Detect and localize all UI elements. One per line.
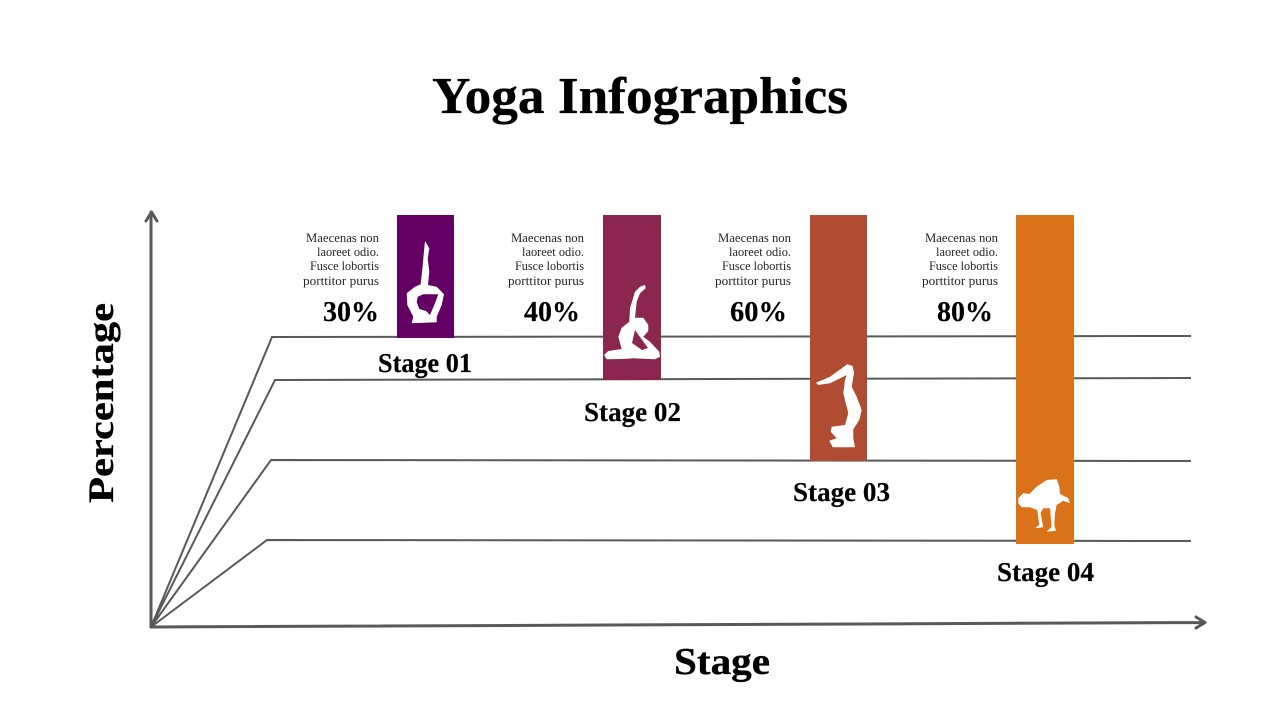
description text: Fusce lobortis — [515, 258, 584, 273]
bar: stage 03 — [810, 215, 867, 461]
description text: porttitor purus — [303, 273, 379, 288]
title: Yoga Infographics — [432, 68, 848, 125]
description text — [715, 230, 791, 288]
description text: porttitor purus — [715, 273, 791, 288]
x axis label: Stage — [674, 641, 770, 683]
description text: Maecenas non — [925, 230, 998, 245]
description text — [303, 230, 379, 288]
bar: stage 01 — [397, 215, 454, 338]
bar: stage 04 — [1016, 215, 1074, 544]
icon: yoga pose 4 — [1018, 479, 1070, 532]
stage 03 group — [715, 215, 890, 507]
percentage: 30% — [323, 296, 379, 328]
icon: yoga pose 1 — [407, 241, 444, 323]
description text: Maecenas non — [511, 230, 584, 245]
icon: yoga pose 3 — [816, 364, 862, 447]
icon: yoga pose 2 — [604, 285, 660, 359]
stage 01 group — [303, 215, 472, 378]
horizontal axis arrow — [151, 617, 1205, 628]
description text: laoreet odio. — [729, 244, 791, 259]
stage 02 group — [508, 215, 681, 427]
stage label: Stage 03 — [793, 477, 890, 507]
vertical axis arrow — [146, 212, 157, 627]
percentage: 60% — [730, 296, 787, 328]
description text: laoreet odio. — [936, 244, 998, 259]
description text: Maecenas non — [306, 230, 379, 245]
percentage: 40% — [524, 296, 580, 328]
description text: laoreet odio. — [317, 244, 379, 259]
description text: laoreet odio. — [522, 244, 584, 259]
description text — [508, 230, 584, 288]
description text: Fusce lobortis — [310, 258, 379, 273]
stage lines — [151, 336, 1191, 627]
stage label: Stage 04 — [997, 557, 1094, 587]
stage label: Stage 01 — [378, 348, 472, 378]
percentage: 80% — [937, 296, 993, 328]
stage label: Stage 02 — [584, 397, 681, 427]
description text: Maecenas non — [718, 230, 791, 245]
y axis label: Percentage — [81, 303, 121, 503]
bar: stage 02 — [603, 215, 661, 380]
description text: porttitor purus — [922, 273, 998, 288]
description text — [922, 230, 998, 288]
description text: Fusce lobortis — [722, 258, 791, 273]
description text: Fusce lobortis — [929, 258, 998, 273]
stage 04 group — [922, 215, 1094, 587]
description text: porttitor purus — [508, 273, 584, 288]
